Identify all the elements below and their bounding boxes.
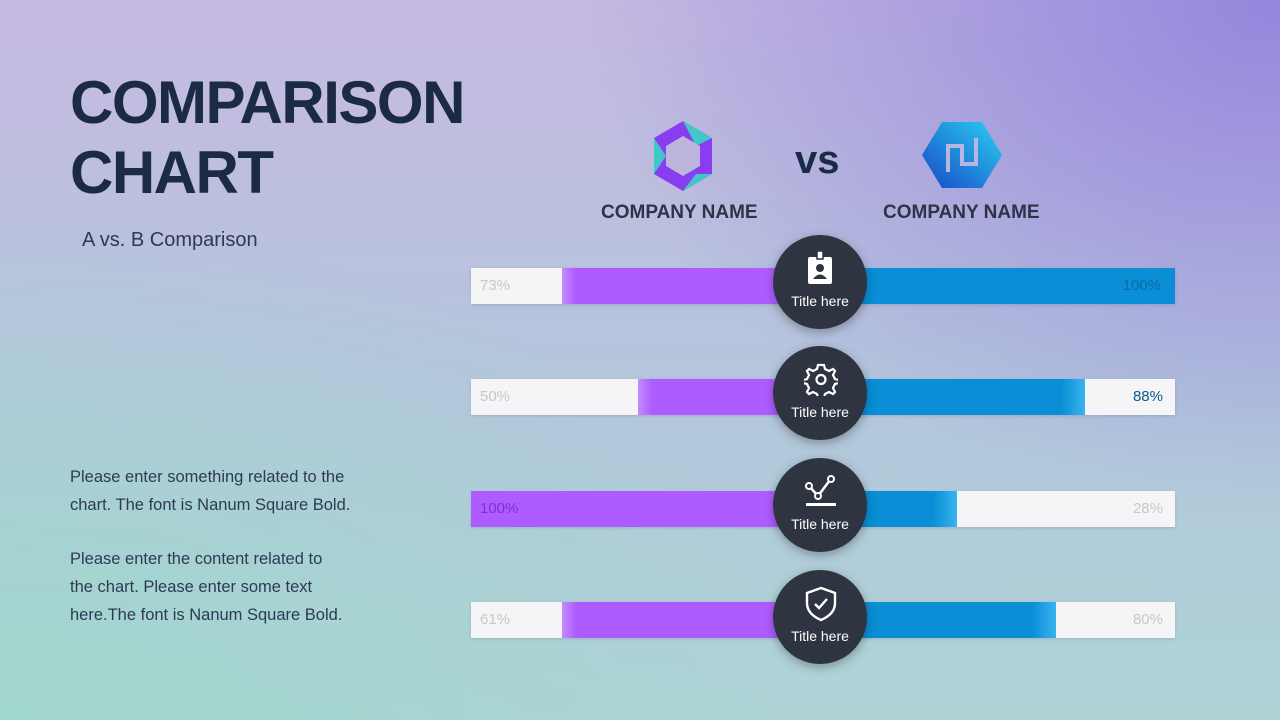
title: COMPARISON [70, 69, 464, 136]
row 3 bar: 28% [1133, 500, 1163, 517]
text block 2: here.The font is Nanum Square Bold. [70, 606, 342, 624]
circle 2: gear: Title here [791, 404, 849, 420]
text block 1: Please enter something related to the [70, 468, 344, 486]
text block 2: Please enter the content related to [70, 550, 322, 568]
company name B: COMPANY NAME [883, 202, 1040, 223]
title: CHART [70, 139, 272, 206]
row 1 bar [471, 268, 1175, 304]
row 2 bar [471, 379, 1175, 415]
circle 1: id badge [773, 235, 867, 329]
circle 3: chart line [773, 458, 867, 552]
circle 4: shield: Title here [791, 628, 849, 644]
row 4 bar: 80% [1133, 611, 1163, 628]
company name A: COMPANY NAME [601, 202, 758, 223]
row 2 bar: 88% [1133, 388, 1163, 405]
row 3 bar: 100% [480, 500, 518, 517]
text block 1 [70, 468, 350, 514]
row 1 bar: 100% [1123, 277, 1161, 294]
row 1 bar: 73% [480, 277, 510, 294]
circle 1: id badge: Title here [791, 293, 849, 309]
vs: vs [795, 138, 840, 182]
subtitle: A vs. B Comparison [82, 229, 258, 251]
text block 2 [70, 550, 342, 624]
row 4 bar: 61% [480, 611, 510, 628]
circle 3: chart line: Title here [791, 516, 849, 532]
text block 1: chart. The font is Nanum Square Bold. [70, 496, 350, 514]
circle 4: shield [773, 570, 867, 664]
logo A [654, 121, 712, 191]
row 2 bar: 50% [480, 388, 510, 405]
title [70, 69, 464, 206]
row 3 bar [471, 491, 1175, 527]
row 4 bar [471, 602, 1175, 638]
circle 2: gear [773, 346, 867, 440]
text block 2: the chart. Please enter some text [70, 578, 312, 596]
logo B [922, 122, 1002, 188]
